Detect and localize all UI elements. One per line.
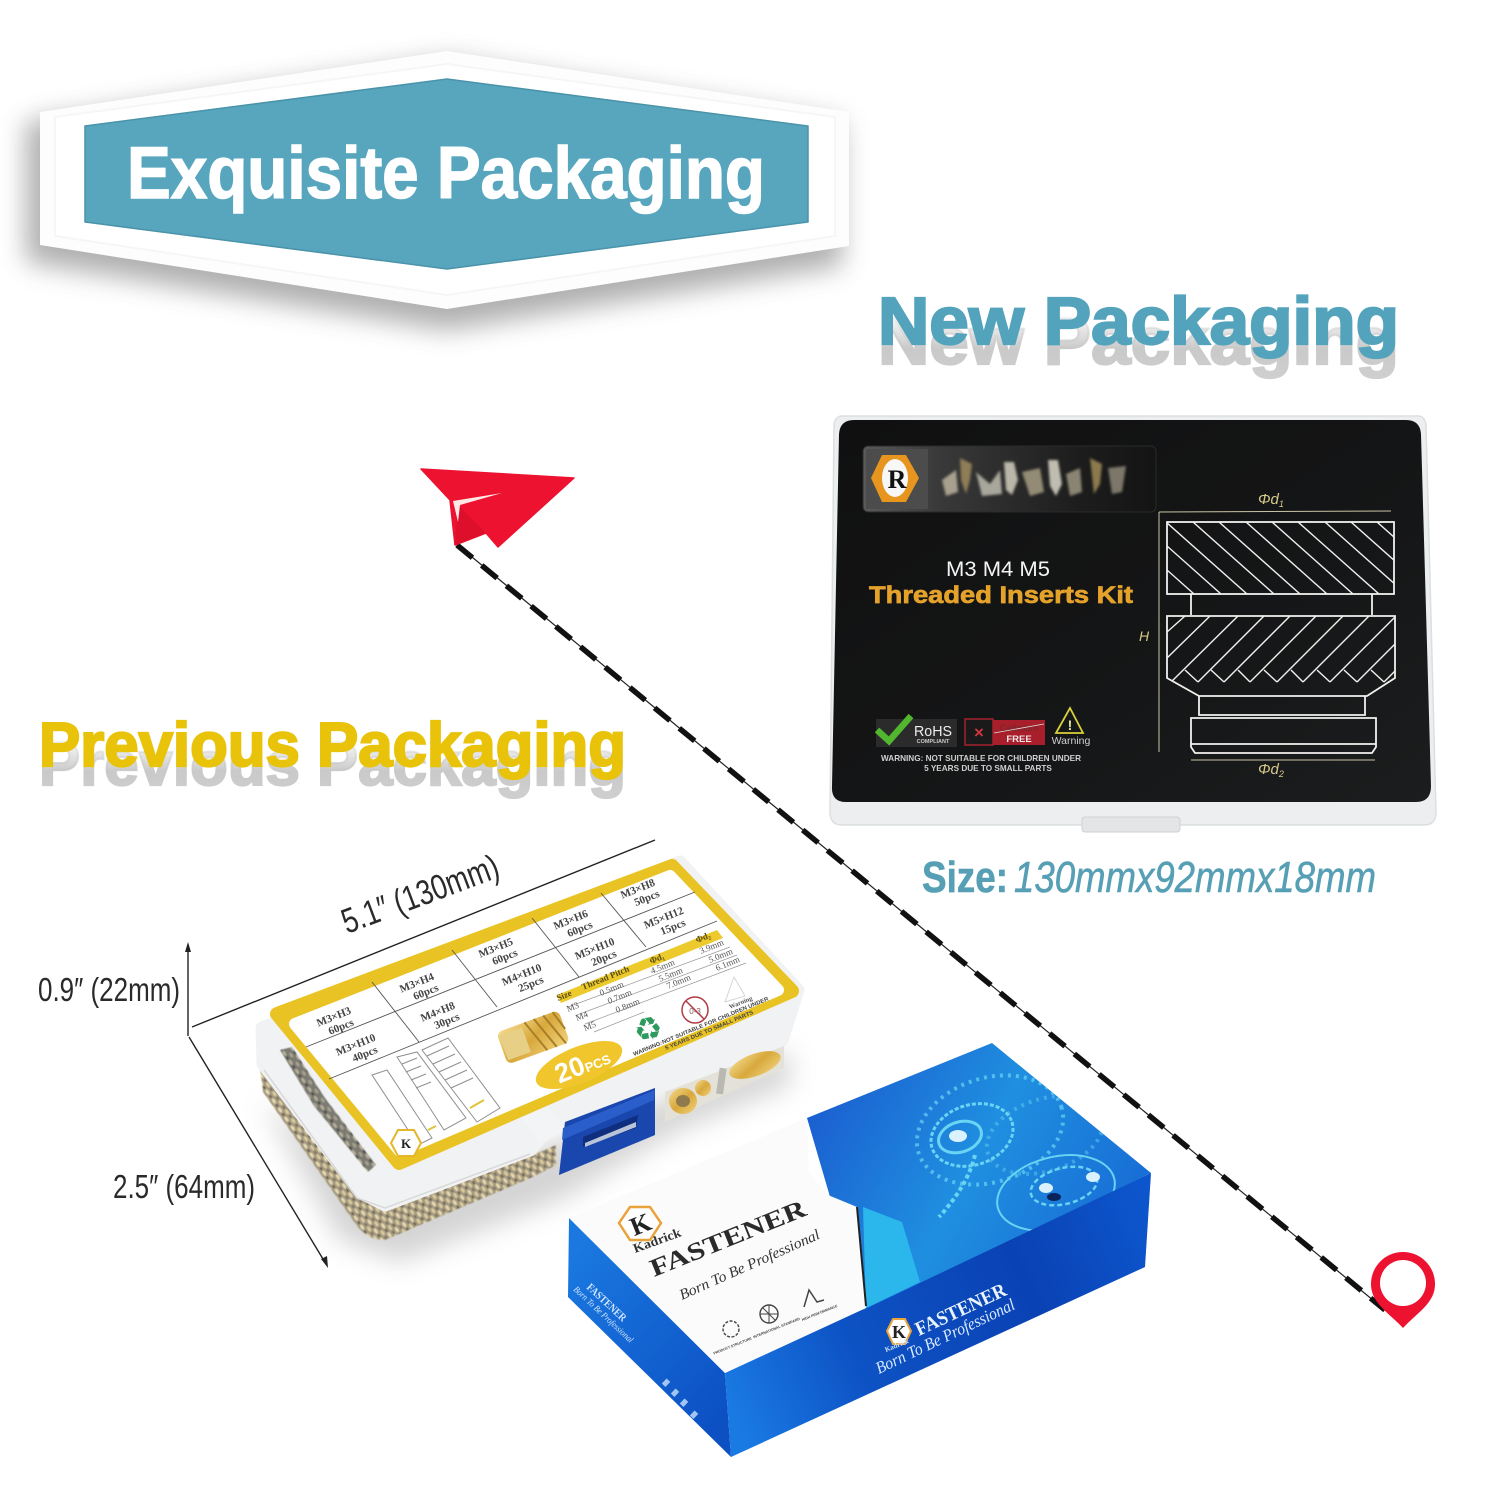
label item text: M5×H12 bbox=[642, 905, 685, 932]
heading: Previous Packaging: Previous Packaging bbox=[39, 711, 626, 780]
label spec table: 3.9mm bbox=[698, 937, 725, 956]
dimension label: height: 0.9″ (22mm) bbox=[38, 971, 180, 1008]
badge: cadmium free: × bbox=[974, 723, 984, 742]
label spec table: Size bbox=[555, 988, 573, 1003]
drawing label: d1: Φd bbox=[1258, 491, 1279, 508]
label item text: M3×H6 bbox=[552, 908, 590, 933]
label item text: M3×H4 bbox=[398, 971, 436, 996]
icon: brass insert photo bbox=[496, 1010, 570, 1065]
left face small icons bbox=[662, 1378, 698, 1419]
label item text: 50pcs bbox=[633, 888, 662, 909]
technical drawing of threaded insert bbox=[1158, 510, 1396, 760]
icon: feature 2 bbox=[753, 1305, 801, 1339]
caption: new packaging size bbox=[922, 853, 1376, 902]
box top title: FASTENER bbox=[646, 1195, 811, 1283]
badge: cadmium free: Cadmium bbox=[1000, 723, 1038, 733]
drawing label: d2: 2 bbox=[1278, 769, 1284, 779]
insert sketch on label bbox=[372, 1038, 500, 1145]
dark separator line bbox=[857, 1207, 866, 1306]
label spec table: Φd₂ bbox=[694, 930, 712, 945]
label item text: M4×H8 bbox=[419, 1000, 457, 1025]
label table grid bbox=[306, 892, 717, 1079]
badge: 20pcs bbox=[530, 1031, 628, 1099]
heading: New Packaging: New Packaging bbox=[878, 284, 1399, 359]
label spec table: M4 bbox=[574, 1009, 590, 1023]
panel: new packaging black case bbox=[830, 416, 1458, 832]
label warning icon and text: Warning bbox=[728, 995, 754, 1011]
icon: feature 2: INTERNATIONAL STANDARD bbox=[753, 1317, 801, 1339]
label item text: 60pcs bbox=[327, 1016, 356, 1038]
label item text: M3×H3 bbox=[315, 1005, 353, 1030]
label spec table: Φd₁ bbox=[648, 951, 666, 966]
label item text: 30pcs bbox=[433, 1011, 462, 1032]
label spec table: 0.8mm bbox=[614, 996, 641, 1015]
label item text: M3×H10 bbox=[334, 1032, 377, 1059]
badge: 20pcs: 20PCS bbox=[550, 1040, 614, 1089]
label spec table: 0.7mm bbox=[606, 987, 633, 1006]
label spec table: 7.0mm bbox=[665, 972, 692, 991]
icon: red paper plane bbox=[421, 469, 574, 547]
box left face bbox=[568, 1218, 731, 1457]
icon: feature 1: PRODUCT STRUCTURE bbox=[713, 1336, 753, 1356]
label item text bbox=[315, 877, 690, 1070]
left face text: FASTENER bbox=[584, 1281, 629, 1325]
label spec table: M3 bbox=[565, 1000, 581, 1014]
heading: New Packaging: New Packaging bbox=[878, 304, 1399, 379]
lid hinge reflection bbox=[522, 1107, 566, 1144]
label item text: M3×H5 bbox=[477, 936, 515, 961]
warning text bbox=[881, 754, 1081, 773]
badge: warning bbox=[1052, 708, 1091, 747]
box shadow bbox=[262, 1050, 790, 1262]
label item text: 60pcs bbox=[566, 919, 595, 940]
warning text: 5 YEARS DUE TO SMALL PARTS bbox=[924, 764, 1052, 773]
blue clasp bbox=[559, 1088, 655, 1175]
black card bbox=[832, 420, 1431, 802]
gear artwork bbox=[915, 1073, 1116, 1231]
icon: no small children: 0-3 bbox=[689, 1007, 701, 1016]
banner title: Exquisite Packaging bbox=[127, 133, 765, 214]
label spec table: 5.5mm bbox=[657, 965, 684, 984]
label spec table: 0.5mm bbox=[598, 979, 625, 998]
label spec table: 4.5mm bbox=[649, 957, 676, 976]
case clasp bbox=[1082, 817, 1180, 832]
card text: sizes: M3 M4 M5 bbox=[946, 558, 1050, 581]
icon: no small children bbox=[682, 997, 708, 1023]
panel: previous packaging clear box bbox=[260, 862, 798, 1262]
panel: blue fastener box bbox=[568, 1043, 1151, 1457]
label item text: M3×H8 bbox=[619, 877, 657, 902]
dimension label: length: 5.1″ (130mm) bbox=[336, 847, 504, 941]
yellow label border bbox=[277, 866, 792, 1163]
front logo: Kadrick bbox=[884, 1337, 910, 1354]
label small logo: K bbox=[401, 1136, 412, 1151]
white label panel bbox=[295, 876, 778, 1151]
box logo: Kadrick bbox=[631, 1224, 684, 1256]
clear plastic case bbox=[830, 416, 1436, 825]
badge: cadmium free: FREE bbox=[1006, 734, 1032, 745]
label spec table: 5.0mm bbox=[707, 946, 734, 965]
cyan accent strip bbox=[863, 1207, 920, 1308]
card text: kit name: Threaded Inserts Kit bbox=[869, 582, 1133, 609]
badge: cadmium free bbox=[965, 719, 1045, 745]
front logo: K bbox=[892, 1322, 906, 1342]
badge: RoHS: RoHS bbox=[914, 723, 952, 740]
box top tagline: Born To Be Professional bbox=[677, 1227, 822, 1304]
caption: new packaging size: 130mmx92mmx18mm bbox=[1014, 853, 1376, 902]
badge: warning: ! bbox=[1068, 717, 1072, 733]
label item text: 60pcs bbox=[491, 947, 520, 968]
threaded inserts inside box bbox=[260, 1068, 556, 1240]
badge: RoHS bbox=[876, 716, 957, 747]
drawing label: d1: 1 bbox=[1279, 499, 1284, 509]
label spec table: M5 bbox=[582, 1019, 598, 1033]
inner grey compartment band bbox=[280, 1047, 376, 1172]
icon: feature 1 bbox=[713, 1321, 753, 1356]
label spec table: 6.1mm bbox=[714, 954, 741, 973]
icon: red location pin bbox=[1371, 1252, 1435, 1328]
dimension label: width: 2.5″ (64mm) bbox=[113, 1168, 255, 1205]
icon: feature 3 bbox=[801, 1290, 839, 1322]
front logo bbox=[884, 1319, 911, 1354]
label item text: M4×H10 bbox=[500, 962, 543, 989]
dimension lines with arrows bbox=[185, 840, 655, 1268]
box logo: K bbox=[626, 1207, 656, 1242]
box front face bbox=[725, 1173, 1151, 1457]
lid lower rim shading bbox=[264, 1070, 530, 1208]
label item text: 40pcs bbox=[351, 1044, 380, 1065]
right compartment walls bbox=[665, 1045, 784, 1122]
badge: warning: Warning bbox=[1052, 735, 1091, 747]
banner: Exquisite Packaging bbox=[26, 51, 849, 330]
label warning icon and text: 5 YEARS DUE TO SMALL PARTS bbox=[664, 1010, 755, 1052]
front tagline: Born To Be Professional bbox=[873, 1295, 1018, 1378]
clear lid bbox=[262, 862, 798, 1205]
front title: FASTENER bbox=[912, 1279, 1010, 1341]
label item text: 25pcs bbox=[517, 974, 546, 995]
label item text: 15pcs bbox=[659, 917, 688, 938]
badge: RoHS: COMPLIANT bbox=[917, 739, 950, 745]
label spec table bbox=[555, 930, 746, 1033]
heading: Previous Packaging: Previous Packaging bbox=[39, 730, 626, 799]
label item text: M5×H10 bbox=[573, 936, 616, 963]
drawing label: d2: Φd bbox=[1258, 761, 1279, 778]
left face text: Born To Be Professional bbox=[572, 1284, 636, 1345]
label warning icon and text bbox=[632, 977, 770, 1058]
icon: recycle: ♻ bbox=[631, 1008, 666, 1050]
label item text: 60pcs bbox=[412, 982, 441, 1003]
logo strip bbox=[863, 446, 1156, 512]
label item text: 20pcs bbox=[590, 948, 619, 969]
label spec table: Thread Pitch bbox=[580, 964, 631, 992]
label small logo bbox=[391, 1130, 421, 1156]
icon: feature 3: HIGH PERFORMANCE bbox=[801, 1304, 839, 1322]
warning text: WARNING: NOT SUITABLE FOR CHILDREN UNDER bbox=[881, 754, 1081, 763]
logo strip: R bbox=[888, 465, 907, 494]
dashed route line bbox=[455, 543, 1385, 1310]
label warning icon and text: WARNING:NOT SUITABLE FOR CHILDREN UNDER bbox=[632, 996, 770, 1058]
white top panel bbox=[569, 1118, 866, 1373]
box top blue bbox=[807, 1043, 1151, 1310]
box logo bbox=[619, 1207, 684, 1256]
drawing label: H: H bbox=[1139, 628, 1150, 644]
caption: new packaging size: Size: bbox=[922, 853, 1008, 902]
